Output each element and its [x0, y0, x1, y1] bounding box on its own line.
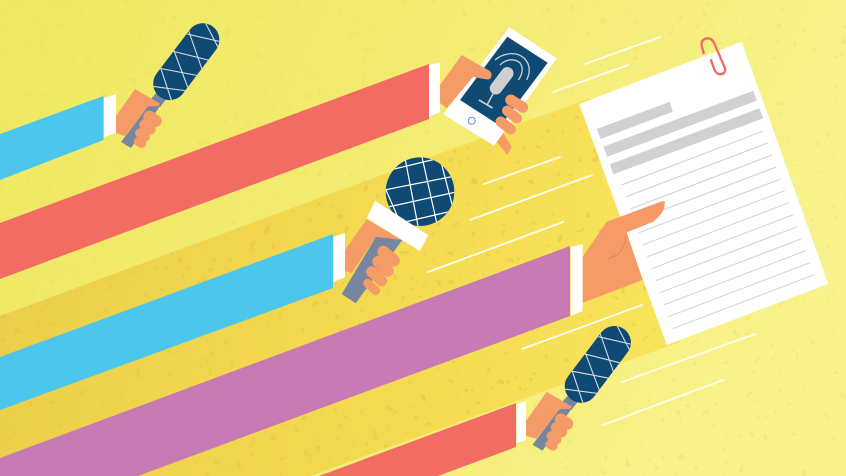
home button [468, 117, 475, 124]
phone screen [460, 37, 548, 126]
hand palm [345, 219, 402, 273]
microphone: bottom right shotgun mic in hand [526, 326, 631, 451]
voice icon [479, 54, 529, 108]
microphone: top left shotgun mic in hand [116, 23, 220, 148]
mic handle [342, 237, 402, 303]
paper sheet [579, 42, 828, 345]
heading bars [597, 91, 763, 174]
fingers [368, 252, 394, 291]
arm: red sleeve, lower [319, 402, 526, 476]
mic head [386, 157, 454, 226]
speed lines [428, 37, 755, 425]
phone body [443, 27, 557, 146]
hand and thumb [440, 55, 492, 108]
body text lines [622, 131, 814, 329]
microphone: phone held in hand [440, 27, 557, 155]
microphone: centre round mic in hand [342, 157, 456, 303]
arm: purple sleeve [0, 244, 583, 476]
hand holding the document [583, 201, 665, 303]
arm: red sleeve, upper [0, 62, 440, 279]
shadow band [0, 98, 680, 476]
mic collar [367, 201, 428, 251]
arm: blue sleeve, middle [0, 233, 345, 410]
paper clip [701, 38, 725, 74]
arm: blue sleeve, upper [0, 94, 116, 180]
fingers [501, 100, 523, 129]
document [579, 38, 828, 345]
lower finger [497, 133, 512, 155]
